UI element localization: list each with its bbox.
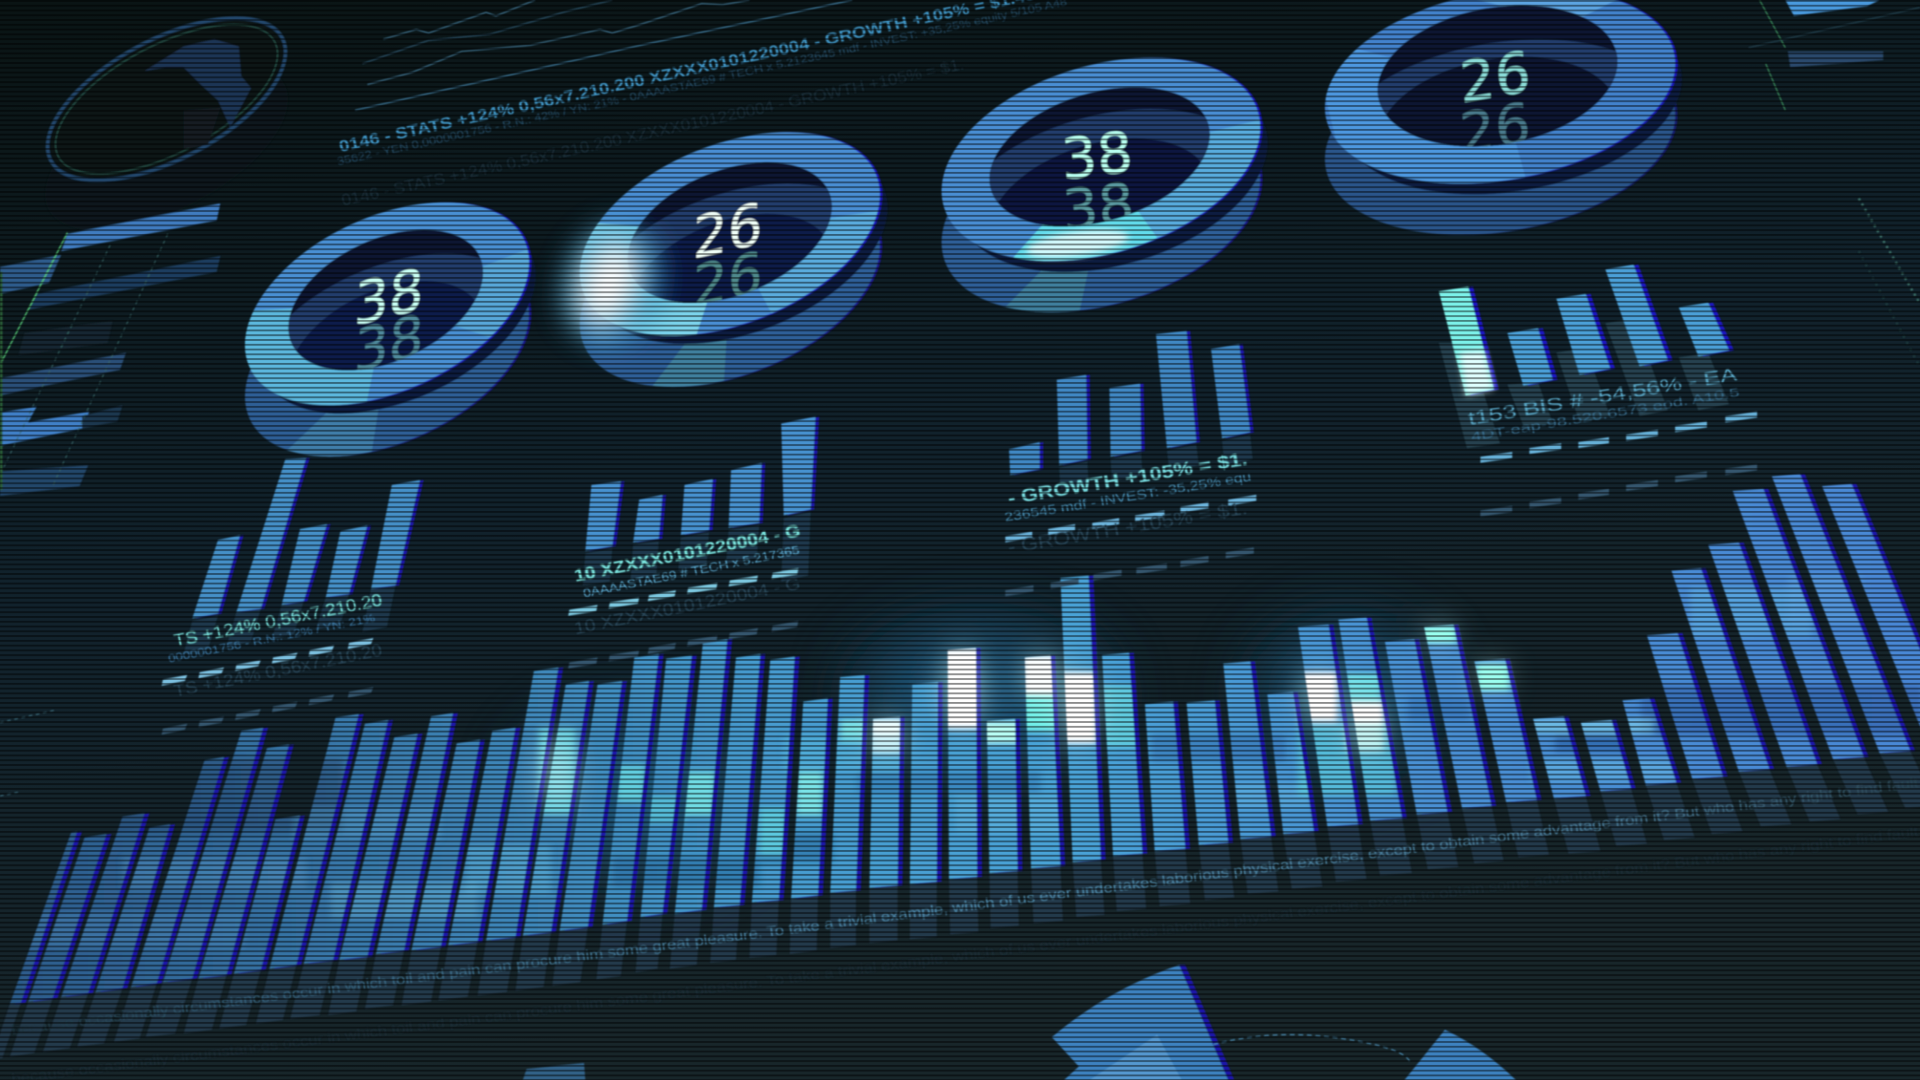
ring top [579,131,884,337]
dashes reflection [1480,464,1757,517]
decorative reflection of main bar chart [0,744,1920,1059]
bars [184,458,424,654]
dashes reflection [568,621,798,669]
ring top [244,201,532,406]
caption reflection: - GROWTH +105% = $1. [1006,497,1249,557]
panel: small chart 4: 4DT-eap-98.520.6573 eod. A10.5 [1470,385,1741,444]
bars [1009,331,1254,490]
bar chart highlights [0,576,1920,949]
dashes [568,568,798,616]
panel: donut 38 (third) [940,56,1268,314]
ring base shadow [940,120,1268,314]
glow behind bar chart [527,631,1433,869]
dashes [1005,495,1256,542]
bars [1439,264,1734,396]
text: top ticker: 0146 - STATS +124% 0,56x7.210.200 XZXXX0101220004 - GROWTH +105% = $1.450 [338,0,1047,156]
ring top: 26 [692,239,763,322]
value: 38 [1059,120,1135,193]
line chart: top trend lines [355,0,852,110]
panel: small chart 1 [162,458,424,735]
dashes [1480,411,1757,463]
ring top [1324,0,1679,185]
decorative dashes at left margin [0,710,55,796]
ring base shadow [1309,0,1697,261]
text: top ticker: 0146 - STATS +124% 0,56x7.210.200 XZXXX0101220004 - GROWTH +105% = $1. [340,56,966,210]
text: body copy under chart: because occasionally circumstances occur in which toil and pain can procure him some great pleasure. To take a trivial example, which of us ever undertakes laborious physical exercise, except to obtain some advantage from it? But who has any right to find fault [11,823,1919,1080]
panel: small chart 4 [1439,264,1757,517]
ring base shadow [579,184,888,388]
ring bloom [1025,224,1130,263]
panel: left horizontal bars [0,203,220,496]
caption reflection: 10 XZXXX0101220004 - G [572,573,802,638]
caption: TS +124% 0,56x7.210.20 [172,589,384,650]
caption: - GROWTH +105% = $1. [1006,448,1249,508]
ring top: 38 [353,301,425,387]
panel: small chart 2: 0AAAASTAE69 # TECH x 5.217365 [582,543,801,600]
bloom over bright bars [542,624,1506,808]
text: body copy under chart [11,774,1919,1080]
panel: small chart 2 [568,416,819,669]
bars [583,416,819,585]
bar chart: main 49 bars [0,474,1920,1004]
ring top: 26 [1457,91,1533,168]
icon: globe dial [19,0,314,265]
panel: small chart 3: 236545 mdf - INVEST: -35,25% equ [1003,469,1252,525]
pie chart fragments at bottom [523,965,1516,1080]
ring top [940,56,1264,262]
panel: small chart 1: 0000001756 - R.N.: 12% / YN: 21% [167,612,376,665]
dashes reflection [1005,547,1254,596]
text: top ticker [336,0,1068,210]
ring bloom [545,210,679,358]
value: 38 [353,254,425,340]
bars reflection [1439,318,1729,448]
ring top: 38 [1060,171,1136,245]
panel: donut 26 (second) [531,131,888,388]
panel: donut 26 (fourth) [1324,0,1682,236]
dashes reflection [162,687,373,735]
panel: top right fragment [1749,0,1920,367]
text: top ticker: 35622 - YEN 0,0000001756 - R.N.: 42% / YN: 21% - 0AAAASTAE69 # TECH x 5.2123645 mdf - INVEST: +35,25% equity 5/105 A48 [336,0,1068,168]
value: 26 [1457,39,1533,117]
caption reflection: TS +124% 0,56x7.210.20 [172,640,384,701]
panel: donut 38 (first) [244,201,536,458]
dashes [162,638,373,686]
panel: small chart 3 [1003,331,1256,596]
caption: 10 XZXXX0101220004 - G [572,520,802,586]
text: body copy under chart: because occasionally circumstances occur in which toil and pain can procure him some great pleasure. To take a trivial example, which of us ever undertakes laborious physical exercise, except to obtain some advantage from it? But who has any right to find fault [11,774,1919,1038]
caption: t153 BIS # -54,56% - EA [1467,363,1739,429]
value: 26 [692,190,763,273]
ring base shadow [244,254,536,458]
